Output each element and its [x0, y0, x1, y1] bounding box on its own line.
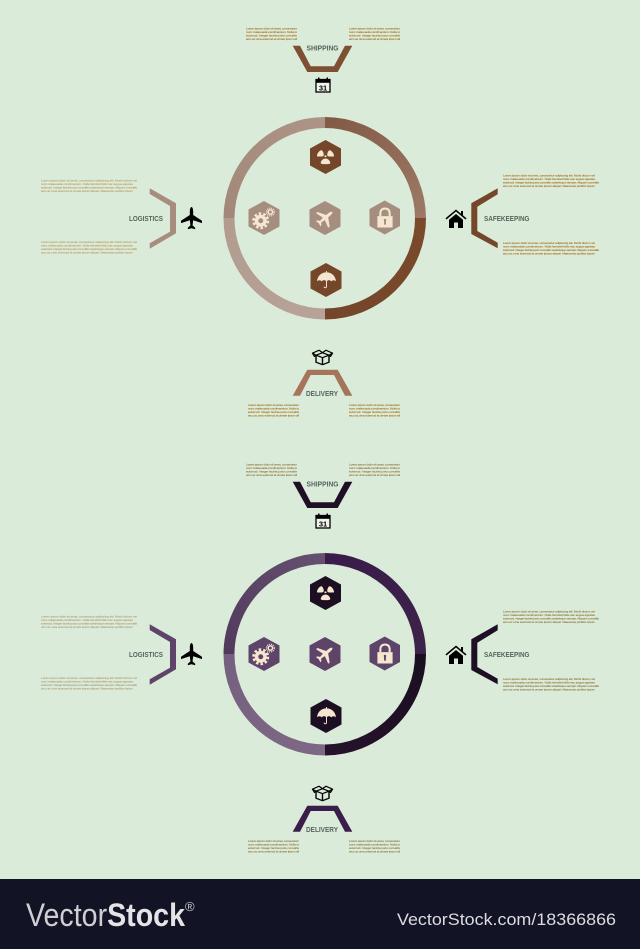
logistics top text: euismod. Integer lacinia justo convallis scelerisque semper. Aliquam convallis: [41, 622, 137, 626]
panel: brown infographic: [41, 26, 599, 418]
logistics bracket: [150, 188, 176, 249]
logistics top text: [41, 614, 137, 629]
delivery section: [248, 350, 400, 418]
safekeeping top text: Lorem ipsum dolor sit amet, consectetur adipiscing elit. Morbi dictum vel: [503, 174, 595, 178]
hexagon: radiation: [310, 576, 341, 610]
hexagon: plane: [310, 201, 340, 235]
safekeeping top text: Lorem ipsum dolor sit amet, consectetur adipiscing elit. Morbi dictum vel: [503, 610, 595, 614]
icon: calendar: 31: [319, 84, 327, 92]
logistics bottom text: Lorem ipsum dolor sit amet, consectetur adipiscing elit. Morbi dictum vel: [41, 676, 137, 680]
icon: calendar: [316, 514, 330, 528]
safekeeping bracket: [471, 188, 498, 248]
safekeeping top text: [503, 610, 599, 624]
delivery right text: Lorem ipsum dolor sit amet, consectetur: [349, 839, 400, 843]
logistics top text: nunc malesuada condimentum. Nulla hendrerit felis nec augue egestas: [41, 182, 133, 186]
safekeeping top text: arcu ac urna euismod at ornare ipsum aliquet. Maecenas porttitor ipsum: [503, 620, 595, 624]
logistics bottom text: nunc malesuada condimentum. Nulla hendrerit felis nec augue egestas: [41, 244, 133, 248]
delivery left text: arcu ac urna euismod at ornare ipsum all: [248, 414, 299, 418]
shipping right text: Lorem ipsum dolor sit amet, consectetur: [349, 26, 400, 30]
shipping section: [246, 462, 400, 528]
logistics bottom text: euismod. Integer lacinia justo convallis scelerisque semper. Aliquam convallis: [41, 247, 137, 251]
icon: house: [446, 210, 466, 228]
delivery left text: [248, 403, 299, 418]
icon: plane: [181, 643, 202, 665]
delivery left text: Lorem ipsum dolor sit amet, consectetur: [248, 839, 299, 843]
logistics top text: nunc malesuada condimentum. Nulla hendrerit felis nec augue egestas: [41, 618, 133, 622]
delivery right text: euismod. Integer lacinia justo convallis: [349, 410, 400, 414]
safekeeping top text: arcu ac urna euismod at ornare ipsum aliquet. Maecenas porttitor ipsum: [503, 184, 595, 188]
shipping right text: euismod. Integer lacinia justo convallis: [349, 470, 400, 474]
logistics bottom text: [41, 676, 137, 690]
safekeeping bracket: [471, 624, 498, 684]
logistics top text: [41, 178, 137, 193]
safekeeping heading: SAFEKEEPING: [484, 214, 530, 223]
safekeeping top text: euismod. Integer lacinia justo convallis scelerisque semper. Aliquam convallis: [503, 616, 599, 620]
safekeeping bottom text: euismod. Integer lacinia justo convallis scelerisque semper. Aliquam convallis: [503, 684, 599, 688]
shipping right text: Lorem ipsum dolor sit amet, consectetur: [349, 462, 400, 466]
safekeeping top text: euismod. Integer lacinia justo convallis scelerisque semper. Aliquam convallis: [503, 180, 599, 184]
shipping left text: [246, 26, 297, 41]
shipping right text: arcu ac urna euismod at ornare ipsum all: [349, 473, 400, 477]
delivery heading: DELIVERY: [306, 389, 338, 398]
shipping left text: Lorem ipsum dolor sit amet, consectetur: [246, 26, 297, 30]
icon: calendar: 31: [319, 520, 327, 528]
delivery left text: nunc malesuada condimentum. Nulla to: [248, 406, 299, 410]
icon: calendar: [316, 78, 330, 92]
shipping heading: SHIPPING: [306, 480, 339, 489]
shipping right text: [349, 462, 400, 477]
hexagon: lock: [370, 636, 400, 670]
delivery left text: euismod. Integer lacinia justo convallis: [248, 846, 299, 850]
panel: purple infographic: [41, 462, 599, 854]
shipping right text: euismod. Integer lacinia justo convallis: [349, 34, 400, 38]
shipping right text: nunc malesuada condimentum. Nulla to: [349, 30, 400, 34]
footer bar: [0, 879, 640, 949]
icon: box: [312, 350, 332, 365]
icon: box: [312, 786, 332, 801]
shipping left text: Lorem ipsum dolor sit amet, consectetur: [246, 462, 297, 466]
logistics top text: Lorem ipsum dolor sit amet, consectetur adipiscing elit. Morbi dictum vel: [41, 614, 137, 618]
shipping heading: SHIPPING: [306, 44, 339, 53]
shipping right text: nunc malesuada condimentum. Nulla to: [349, 466, 400, 470]
safekeeping top text: [503, 174, 599, 188]
shipping left text: euismod. Integer lacinia justo convallis: [246, 470, 297, 474]
logistics bottom text: Lorem ipsum dolor sit amet, consectetur adipiscing elit. Morbi dictum vel: [41, 240, 137, 244]
hexagon: gears: [248, 637, 280, 671]
safekeeping bottom text: nunc malesuada condimentum. Nulla hendrerit felis nec augue egestas: [503, 244, 595, 248]
logistics bottom text: arcu ac urna euismod at ornare ipsum aliquet. Maecenas porttitor ipsum: [41, 686, 133, 690]
safekeeping section: [446, 174, 599, 256]
delivery section: [248, 786, 400, 854]
logistics heading: LOGISTICS: [129, 650, 163, 659]
delivery right text: arcu ac urna euismod at ornare ipsum all: [349, 414, 400, 418]
hexagon: gears: [248, 201, 280, 235]
hexagon: plane: [310, 637, 340, 671]
safekeeping bottom text: euismod. Integer lacinia justo convallis scelerisque semper. Aliquam convallis: [503, 248, 599, 252]
shipping bracket: [293, 46, 352, 72]
safekeeping bottom text: arcu ac urna euismod at ornare ipsum aliquet. Maecenas porttitor ipsum: [503, 252, 595, 256]
delivery right text: euismod. Integer lacinia justo convallis: [349, 846, 400, 850]
safekeeping heading: SAFEKEEPING: [484, 650, 530, 659]
delivery bracket: [293, 370, 352, 396]
shipping left text: euismod. Integer lacinia justo convallis: [246, 34, 297, 38]
delivery right text: [349, 839, 400, 854]
registered mark: ®: [185, 899, 195, 914]
delivery left text: nunc malesuada condimentum. Nulla to: [248, 842, 299, 846]
logistics section: [41, 614, 202, 690]
logistics bottom text: [41, 240, 137, 254]
delivery left text: [248, 839, 299, 854]
safekeeping bottom text: nunc malesuada condimentum. Nulla hendrerit felis nec augue egestas: [503, 680, 595, 684]
logistics heading: LOGISTICS: [129, 214, 163, 223]
delivery right text: nunc malesuada condimentum. Nulla to: [349, 406, 400, 410]
delivery right text: Lorem ipsum dolor sit amet, consectetur: [349, 403, 400, 407]
shipping bracket: [293, 482, 352, 508]
icon: house: [446, 646, 466, 664]
footer image id: VectorStock.com/18366866: [397, 910, 616, 929]
delivery left text: arcu ac urna euismod at ornare ipsum all: [248, 850, 299, 854]
delivery left text: euismod. Integer lacinia justo convallis: [248, 410, 299, 414]
logistics bottom text: euismod. Integer lacinia justo convallis scelerisque semper. Aliquam convallis: [41, 683, 137, 687]
shipping section: [246, 26, 400, 92]
shipping right text: arcu ac urna euismod at ornare ipsum all: [349, 37, 400, 41]
shipping right text: [349, 26, 400, 41]
delivery right text: [349, 403, 400, 418]
hexagon: radiation: [310, 140, 341, 174]
safekeeping top text: nunc malesuada condimentum. Nulla hendrerit felis nec augue egestas: [503, 613, 595, 617]
shipping left text: arcu ac urna euismod at ornare ipsum all: [246, 37, 297, 41]
delivery bracket: [293, 806, 352, 832]
shipping left text: [246, 462, 297, 477]
safekeeping top text: nunc malesuada condimentum. Nulla hendrerit felis nec augue egestas: [503, 177, 595, 181]
delivery heading: DELIVERY: [306, 825, 338, 834]
icon: plane: [181, 207, 202, 229]
safekeeping bottom text: [503, 241, 599, 256]
logistics bottom text: nunc malesuada condimentum. Nulla hendrerit felis nec augue egestas: [41, 680, 133, 684]
safekeeping bottom text: arcu ac urna euismod at ornare ipsum aliquet. Maecenas porttitor ipsum: [503, 688, 595, 692]
safekeeping section: [446, 610, 599, 692]
shipping left text: nunc malesuada condimentum. Nulla to: [246, 466, 297, 470]
safekeeping bottom text: Lorem ipsum dolor sit amet, consectetur adipiscing elit. Morbi dictum vel: [503, 677, 595, 681]
footer logo: VectorStock: [26, 897, 185, 933]
safekeeping bottom text: Lorem ipsum dolor sit amet, consectetur adipiscing elit. Morbi dictum vel: [503, 241, 595, 245]
delivery right text: arcu ac urna euismod at ornare ipsum all: [349, 850, 400, 854]
logistics section: [41, 178, 202, 254]
hexagon: umbrella: [310, 263, 342, 297]
logistics bottom text: arcu ac urna euismod at ornare ipsum aliquet. Maecenas porttitor ipsum: [41, 250, 133, 254]
logistics top text: Lorem ipsum dolor sit amet, consectetur adipiscing elit. Morbi dictum vel: [41, 178, 137, 182]
logistics top text: arcu ac urna euismod at ornare ipsum aliquet. Maecenas porttitor ipsum: [41, 189, 133, 193]
shipping left text: arcu ac urna euismod at ornare ipsum all: [246, 473, 297, 477]
delivery left text: Lorem ipsum dolor sit amet, consectetur: [248, 403, 299, 407]
hexagon: lock: [370, 200, 400, 234]
hexagon: umbrella: [310, 699, 342, 733]
safekeeping bottom text: [503, 677, 599, 692]
logistics top text: euismod. Integer lacinia justo convallis scelerisque semper. Aliquam convallis: [41, 186, 137, 190]
ring: [229, 558, 420, 750]
logistics bracket: [150, 624, 176, 685]
logistics top text: arcu ac urna euismod at ornare ipsum aliquet. Maecenas porttitor ipsum: [41, 625, 133, 629]
ring: [229, 122, 420, 314]
delivery right text: nunc malesuada condimentum. Nulla to: [349, 842, 400, 846]
shipping left text: nunc malesuada condimentum. Nulla to: [246, 30, 297, 34]
